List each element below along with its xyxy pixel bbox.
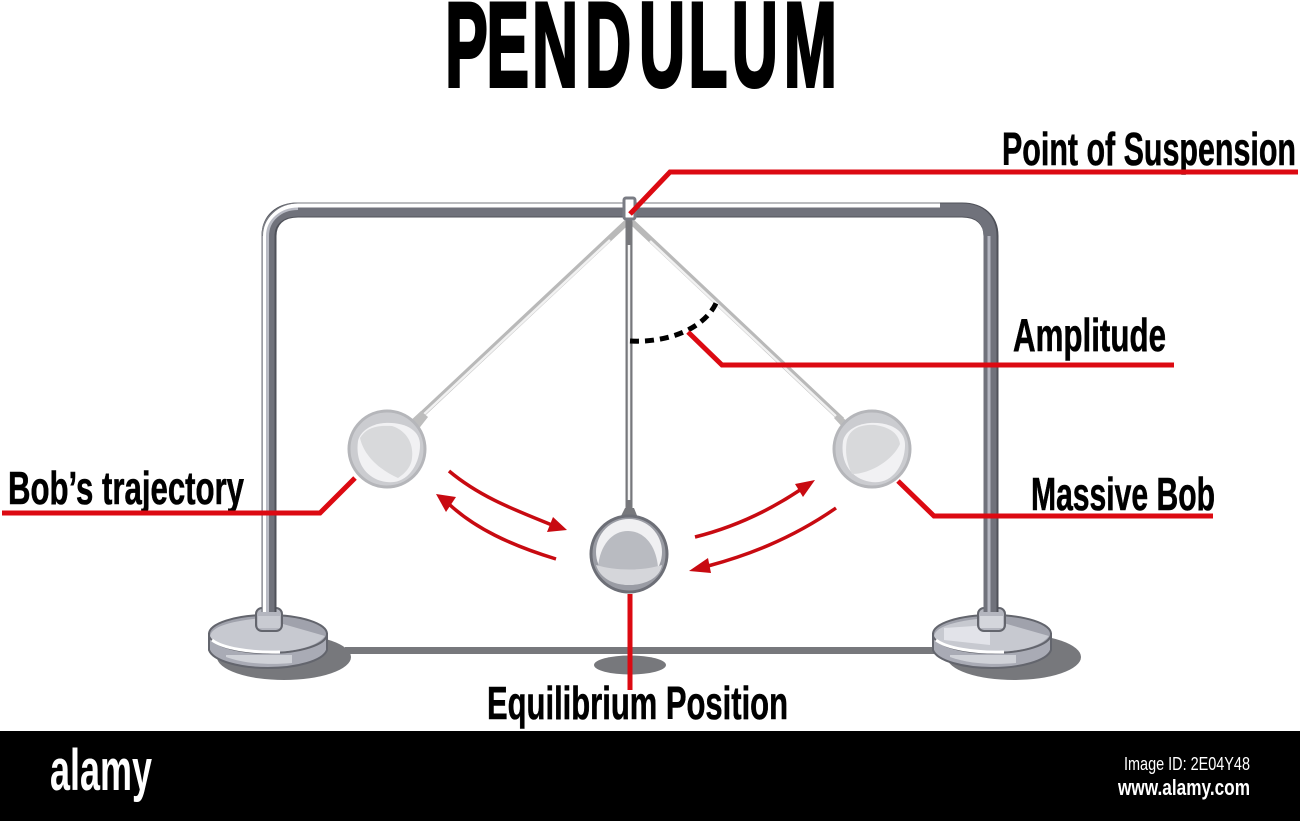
centre bob	[591, 508, 667, 592]
arrow: centre to left	[436, 494, 556, 559]
arrow: right to centre	[689, 508, 836, 573]
label: equilibrium position: Equilibrium Position	[487, 677, 788, 729]
right base	[933, 608, 1081, 680]
left base	[209, 608, 351, 680]
label: amplitude: Amplitude	[1013, 309, 1166, 361]
left bob	[349, 411, 428, 487]
pendulum stand	[209, 203, 1081, 680]
frame	[262, 203, 991, 612]
website: www.alamy.com	[1117, 775, 1250, 800]
arrow: left to centre	[449, 471, 567, 532]
pendulum strings	[416, 220, 842, 516]
label: amplitude	[688, 309, 1174, 365]
footer logo: alamy	[50, 738, 152, 803]
amplitude arc	[630, 301, 717, 341]
suspension clamp	[624, 198, 635, 219]
footer bar	[0, 731, 1300, 821]
arrow: centre to right	[695, 480, 815, 537]
ground line	[345, 647, 940, 654]
label: bob's trajectory: Bob’s trajectory	[8, 462, 244, 514]
image id: Image ID: 2E04Y48	[1124, 754, 1250, 774]
label: massive bob	[898, 468, 1215, 520]
right bob	[834, 411, 910, 487]
equilibrium shadow	[594, 656, 666, 674]
swing arrows	[436, 471, 836, 573]
label: point of suspension	[630, 123, 1298, 214]
